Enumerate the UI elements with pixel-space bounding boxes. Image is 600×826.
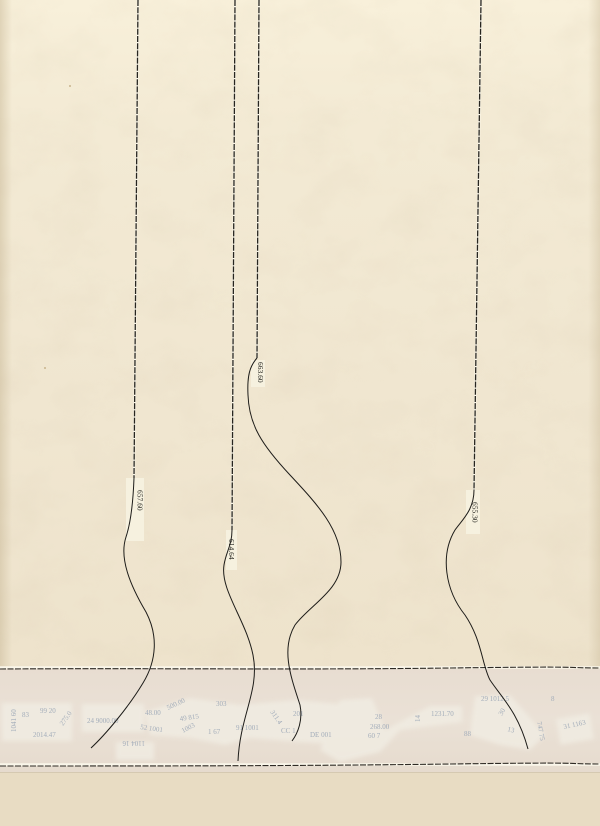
torn paper slips [2, 695, 594, 762]
lower paper strip [0, 772, 600, 826]
scattered figures on the slips: 28 [375, 713, 382, 721]
scattered figures on the slips: 24 9000.00 [87, 717, 119, 725]
scattered figures on the slips: DE 001 [310, 731, 332, 739]
stitched line: bottom of band [0, 763, 600, 766]
tag: 657.60 [126, 478, 144, 541]
scattered figures on the slips: 88 [464, 730, 472, 738]
scattered figures on the slips [10, 695, 587, 747]
scattered figures on the slips: 30 [497, 707, 507, 717]
panel: translucent band [0, 669, 600, 772]
scattered figures on the slips: 99 20 [40, 707, 56, 715]
scattered figures on the slips: 60 7 [368, 732, 381, 740]
tag: 663.60: 663.60 [256, 362, 265, 383]
thread 4 with tag 655.30 [446, 0, 528, 749]
thread 3 with tag 663.60 [248, 0, 341, 741]
scattered figures on the slips: 1003 [180, 721, 197, 735]
scattered figures on the slips: 1041 60 [10, 709, 18, 732]
tag: 614.64: 614.64 [227, 539, 236, 560]
scattered figures on the slips: 31 1163 [563, 718, 587, 731]
tag: 655.30: 655.30 [470, 502, 480, 523]
scattered figures on the slips: 2014.47 [33, 731, 56, 739]
scattered figures on the slips: 311.4 [268, 709, 284, 726]
scattered figures on the slips: CC 1 [281, 727, 296, 735]
scattered figures on the slips: 52 1001 [140, 723, 164, 734]
scattered figures on the slips: 275.0 [58, 709, 74, 727]
scattered figures on the slips: 500.00 [165, 696, 187, 712]
scattered figures on the slips: 83 [22, 711, 30, 719]
scattered figures on the slips: 49 815 [179, 712, 200, 723]
thread 2 with tag 614.64 [224, 0, 254, 761]
scattered figures on the slips: 48.00 [145, 709, 161, 717]
scattered figures on the slips: 14 [414, 714, 422, 722]
stitched line: top of band [0, 667, 600, 669]
scattered figures on the slips: 747 75 [535, 721, 546, 742]
scattered figures on the slips: 13 [506, 725, 516, 735]
scattered figures on the slips: 1104 16 [122, 739, 145, 747]
scattered figures on the slips: 91 1001 [236, 724, 259, 732]
tag: 655.30 [466, 490, 480, 534]
scattered figures on the slips: 1231.70 [431, 710, 454, 718]
scattered figures on the slips: 303 [216, 700, 227, 708]
tag: 663.60 [251, 360, 265, 387]
thread 1 with tag 657.60 [91, 0, 154, 748]
scattered figures on the slips: 1 67 [208, 728, 221, 736]
scattered figures on the slips: 8 [551, 695, 555, 703]
scattered figures on the slips: 201 [293, 710, 304, 718]
scattered figures on the slips: 29 1012.5 [481, 695, 510, 703]
tag: 614.64 [226, 530, 237, 570]
tag: 657.60: 657.60 [136, 490, 144, 511]
scattered figures on the slips: 268.00 [370, 723, 390, 731]
